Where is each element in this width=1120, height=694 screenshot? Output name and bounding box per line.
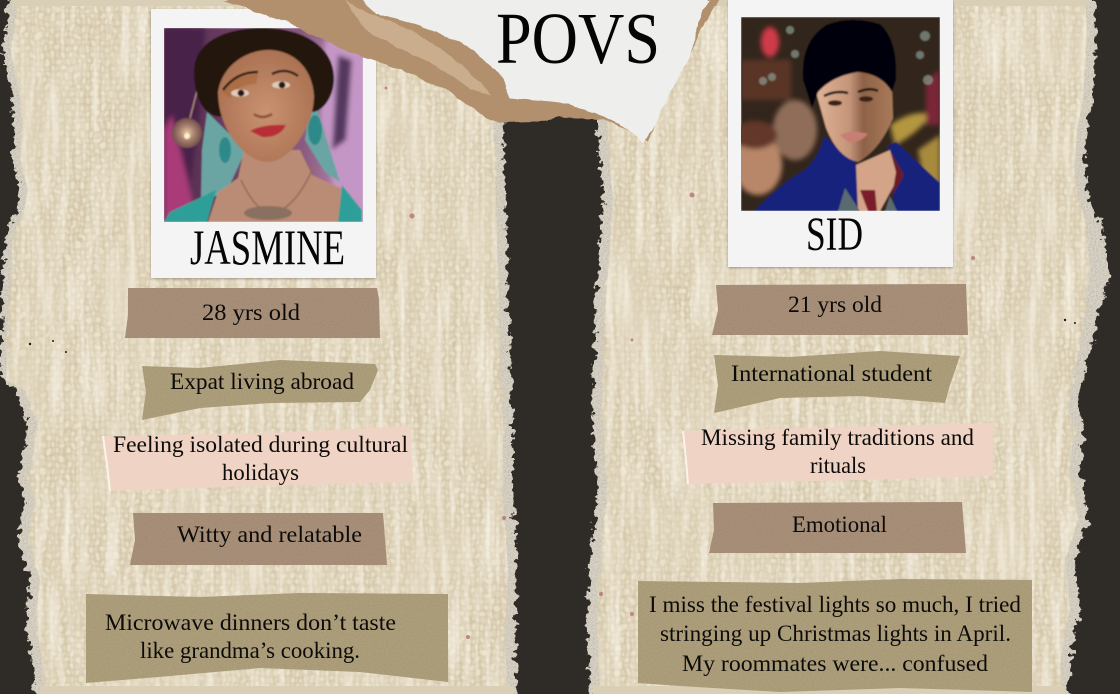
photo: Jasmine portrait: [164, 28, 363, 222]
panel: right torn paper: [587, 0, 1110, 694]
quote: Sid: My roommates were... confused: [682, 651, 989, 676]
tag: Sid age: 21 yrs old: [788, 292, 883, 317]
tag: Jasmine age: 28 yrs old: [202, 300, 301, 325]
quote: Sid: I miss the festival lights so much, I tried: [649, 592, 1021, 617]
tag: Sid feeling: Missing family traditions and: [701, 425, 974, 450]
tag: Sid situation: International student: [731, 361, 933, 386]
tag: Jasmine feeling: [103, 426, 413, 491]
photo: Sid portrait: [733, 17, 940, 211]
polaroid: Jasmine: [151, 9, 376, 278]
tag: Jasmine feeling: holidays: [222, 460, 299, 485]
quote: Jasmine: Microwave dinners don’t taste: [105, 610, 396, 635]
tag: Jasmine feeling: Feeling isolated during cultural: [113, 432, 408, 457]
name: Jasmine: JASMINE: [190, 219, 345, 275]
tag: Sid age: [712, 284, 968, 335]
tag: Jasmine situation: [142, 360, 378, 420]
title: POVS: [496, 0, 660, 79]
quote: Sid: [638, 579, 1032, 692]
polaroid: Sid: [728, 0, 953, 267]
tag: Jasmine situation: Expat living abroad: [170, 369, 354, 394]
quote: Jasmine: like grandma’s cooking.: [140, 638, 360, 663]
tag: Jasmine age: [125, 288, 380, 338]
panel: left torn paper: [0, 0, 520, 694]
tag: Sid feeling: rituals: [810, 453, 866, 478]
tag: Sid tone: [709, 502, 966, 553]
name: Sid: SID: [806, 208, 863, 261]
quote: Sid: stringing up Christmas lights in April.: [660, 621, 1011, 646]
brown torn backing: [222, 0, 719, 142]
paper specks: [384, 86, 975, 639]
tag: Sid situation: [714, 351, 960, 413]
tag: Sid tone: Emotional: [792, 512, 887, 537]
white paper: [364, 0, 710, 143]
tag: Jasmine tone: [130, 513, 387, 565]
tag: Jasmine tone: Witty and relatable: [177, 522, 362, 547]
torn title paper: [222, 0, 719, 143]
quote: Jasmine: [86, 593, 448, 683]
tag: Sid feeling: [683, 423, 993, 484]
